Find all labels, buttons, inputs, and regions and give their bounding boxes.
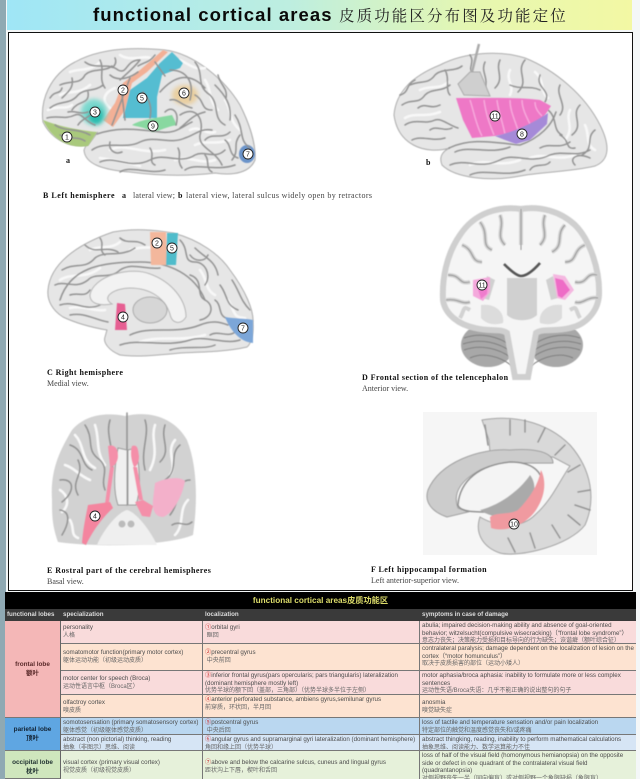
number labels a: 7 <box>246 152 250 158</box>
frontal row 4 <box>61 695 636 718</box>
caption B: B Left hemisphere <box>43 191 115 200</box>
occipital lobe label: occipital lobe <box>12 759 53 766</box>
frontal lobe label: 额叶 <box>26 670 39 676</box>
caption F: Left anterior-superior view. <box>371 576 459 585</box>
number labels a: 2 <box>121 88 125 94</box>
occipital row: loss of half of the visual field (homonymous hemianopsia) on the opposite <box>422 752 623 759</box>
table header: symptoms in case of damage <box>422 611 508 618</box>
occipital row: 视觉皮质（初级视觉皮质） <box>63 768 135 774</box>
frontal row 4: anosmia <box>422 699 445 706</box>
occipital row: 距状沟上下唇，楔叶和舌回 <box>205 768 277 774</box>
panel: brain figures frame <box>8 32 633 591</box>
number labels c <box>118 238 248 333</box>
caption C: Medial view. <box>47 379 89 388</box>
caption E: Basal view. <box>47 577 84 586</box>
parietal lobe label: 顶叶 <box>26 734 39 742</box>
left edge strip <box>0 0 6 779</box>
number labels c: 4 <box>121 314 125 322</box>
table header: localization <box>205 611 239 618</box>
region 5 postcentral gyrus <box>123 52 183 118</box>
brain f: hippocampal formation <box>423 412 597 555</box>
parietal row 1: loss of tactile and temperature sensation and/or pain localization <box>422 719 598 726</box>
region 2 precentral gyrus <box>103 50 168 127</box>
brain b: lateral sulcus opened: b <box>426 158 431 167</box>
frontal row 3: sentences <box>422 680 450 687</box>
parietal row 1: somotosensation (primary somatosensory cortex) <box>63 719 198 726</box>
frontal row 2: 取决于皮质损害的部位（运动小矮人） <box>422 661 524 667</box>
brain c: right hemisphere medial view <box>48 230 253 356</box>
number labels c: 5 <box>170 246 174 252</box>
frontal row 1: personality <box>63 624 93 631</box>
region 11 insula <box>456 98 551 138</box>
caption B: lateral view; <box>133 191 175 200</box>
caption C: C Right hemisphere <box>47 368 123 377</box>
number labels a: 3 <box>93 110 97 116</box>
parietal row 1: ⑤postcentral gyrus <box>205 719 258 726</box>
frontal lobe label <box>5 621 61 718</box>
frontal row 2: ②precentral gyrus <box>205 649 256 656</box>
title english: functional cortical areas <box>93 4 333 25</box>
parietal row 2: 抽象（非图示）思维、阅读 <box>63 745 135 751</box>
frontal row 1: ①orbital gyri <box>205 624 240 631</box>
frontal row 1: abulia; impaired decision-making ability and absence of goal-oriented <box>422 622 612 629</box>
caption B <box>43 191 372 200</box>
region 8 <box>495 113 548 144</box>
brain a: left hemisphere lateral view <box>42 49 255 175</box>
frontal row 2: 躯体运动功能（初级运动皮质） <box>63 658 147 664</box>
parietal row 2: 抽象思维、阅读能力、数学运算能力不佳 <box>422 745 530 751</box>
frontal row 4: 前穿质，环状回，半月回 <box>205 705 271 711</box>
frontal row 2: 中央前回 <box>207 658 231 664</box>
region 7 visual cortex <box>239 145 255 163</box>
number labels c: 7 <box>241 326 245 332</box>
table title: functional cortical areas皮质功能区 <box>253 596 388 605</box>
caption B: a <box>122 191 126 200</box>
frontal row 3: 运动性失语/Broca失语：几乎不能正确的说出整句的句子 <box>422 688 571 694</box>
frontal row 2: cortex（“motor homunculus”） <box>422 653 506 660</box>
occipital lobe label <box>5 751 61 779</box>
frontal row 3: motor aphasia/broca aphasia: inability to formulate more or less complex <box>422 672 621 679</box>
number label e <box>90 511 100 521</box>
frontal row 4: olfactroy cortex <box>63 699 105 706</box>
occipital row <box>61 751 636 779</box>
frontal row 3: motor center for speech (Broca) <box>63 675 150 682</box>
frontal row 3: ③inferior frontal gyrus(pars opercularis; pars triangularis) lateralization <box>205 672 398 679</box>
parietal row 1: 中央后回 <box>207 728 231 734</box>
brain a: left hemisphere lateral view: a <box>66 156 70 165</box>
number labels a <box>62 85 253 159</box>
table header: functional lobes <box>7 611 54 618</box>
title chinese: 皮质功能区分布图及功能定位 <box>339 4 568 26</box>
number labels b: 11 <box>491 114 499 120</box>
retractor <box>458 44 490 96</box>
caption D: D Frontal section of the telencephalon <box>362 373 509 382</box>
frontal row 1: 眶回 <box>207 633 219 639</box>
region 6 angular <box>172 85 198 105</box>
frontal row 1 <box>61 621 636 644</box>
number labels a: 1 <box>65 134 69 142</box>
caption B: lateral view, lateral sulcus widely open by retractors <box>186 191 372 200</box>
frontal lobe label: frontal lobe <box>15 661 50 668</box>
caption D <box>362 373 509 393</box>
panel: brain figures <box>42 43 608 586</box>
title banner <box>7 0 632 30</box>
parietal row 2: ⑥angular gyrus and supramarginal gyri lateralization (dominant hemisphere) <box>205 736 415 743</box>
caption F: F Left hippocampal formation <box>371 565 487 574</box>
number label f: 10 <box>510 522 518 528</box>
frontal row 4: 嗅觉缺失症 <box>422 708 452 714</box>
frontal row 3 <box>61 671 636 695</box>
number label d <box>477 280 487 290</box>
table header <box>5 609 636 621</box>
frontal row 3: 优势半球的额下回（盖部，三角部）（优势半球多半位于左侧） <box>205 688 370 694</box>
frontal row 1: behavior; witzelsucht(compulsive wisecracking)（“frontal lobe syndrome”） <box>422 630 628 637</box>
table: functional cortical areas <box>5 592 636 779</box>
brain e: basal view <box>52 413 196 545</box>
parietal lobe label: parietal lobe <box>14 726 51 733</box>
number label e: 4 <box>93 514 97 520</box>
parietal row 2: abstract thingking, reading, inability to perform mathematical calculations <box>422 736 621 743</box>
frontal row 2: somatomotor function(primary motor cortex) <box>63 649 183 656</box>
caption D: Anterior view. <box>362 384 408 393</box>
parietal row 1 <box>61 718 636 735</box>
occipital row: visual cortex (primary visual cortex) <box>63 759 160 766</box>
occipital row: (quadrantanopsia) <box>422 767 472 774</box>
parietal row 2 <box>61 735 636 751</box>
frontal row 1: 人格 <box>63 633 75 639</box>
number labels a: 9 <box>151 124 155 130</box>
caption F <box>371 565 487 585</box>
number label f <box>509 519 519 529</box>
frontal row 4: 嗅皮质 <box>63 708 81 714</box>
table header: specialization <box>63 611 104 618</box>
caption E: E Rostral part of the cerebral hemispheres <box>47 566 211 575</box>
occipital lobe label: 枕叶 <box>26 768 39 774</box>
number labels c: 2 <box>155 240 159 248</box>
number labels b: 8 <box>520 132 524 138</box>
cerebrum section <box>443 208 599 377</box>
occipital row: ⑦above and below the calcarine sulcus, cuneus and lingual gyrus <box>205 759 386 766</box>
number label d: 11 <box>478 282 486 290</box>
caption B: b <box>178 191 183 200</box>
number labels a: 5 <box>140 96 144 102</box>
occipital row: side or defect in one quadrant of the contralateral visual field <box>422 760 587 767</box>
region 3 broca <box>81 99 107 125</box>
region 1 orbital gyri <box>43 120 97 147</box>
brain b: lateral sulcus opened <box>394 44 607 179</box>
parietal lobe label <box>5 718 61 751</box>
cerebellum <box>461 323 583 367</box>
caption C <box>47 368 123 388</box>
frontal row 2 <box>61 644 636 671</box>
parietal row 1: 躯体感觉（初级躯体感觉皮质） <box>63 728 147 734</box>
parietal row 1: 特定部位的触觉和温度感觉丧失和/或疼痛 <box>422 728 532 734</box>
brain d: frontal section <box>443 208 599 377</box>
parietal row 2: 角回和缘上回（优势半球） <box>205 745 277 751</box>
caption E <box>47 566 211 586</box>
frontal row 3: 运动性语言中枢（Broca区） <box>63 684 139 690</box>
parietal row 2: abstract (non pictorial) thinking, reading <box>63 736 171 743</box>
frontal row 4: ④anterior perforated substance, ambiens gyrus,semilunar gyrus <box>205 696 381 703</box>
number labels a: 6 <box>182 90 186 98</box>
frontal row 2: contralateral paralysis; damage dependent on the localization of lesion on the <box>422 645 634 652</box>
number labels b <box>490 111 527 139</box>
region 9 <box>132 115 177 132</box>
frontal row 3: (dominant hemisphere mostly left) <box>205 680 298 687</box>
